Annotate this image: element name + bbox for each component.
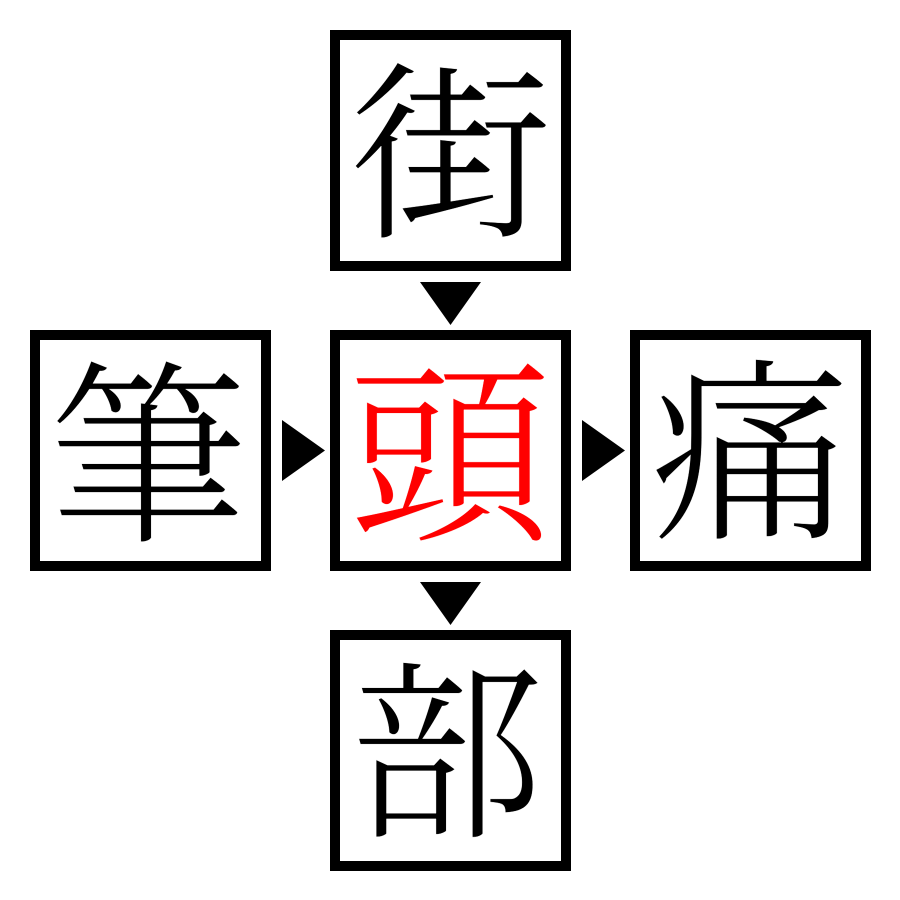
- right tile: 痛: 痛: [651, 348, 850, 567]
- center tile: 頭: 頭: [348, 352, 551, 569]
- top tile: 街: 街: [350, 52, 552, 265]
- arrow: left to center: [282, 420, 325, 481]
- arrow: top to center: [420, 282, 481, 325]
- arrow: center to right: [582, 420, 625, 481]
- left tile: 筆: 筆: [50, 351, 247, 570]
- arrow: center to bottom: [420, 582, 481, 625]
- bottom tile: 部: 部: [350, 651, 544, 864]
